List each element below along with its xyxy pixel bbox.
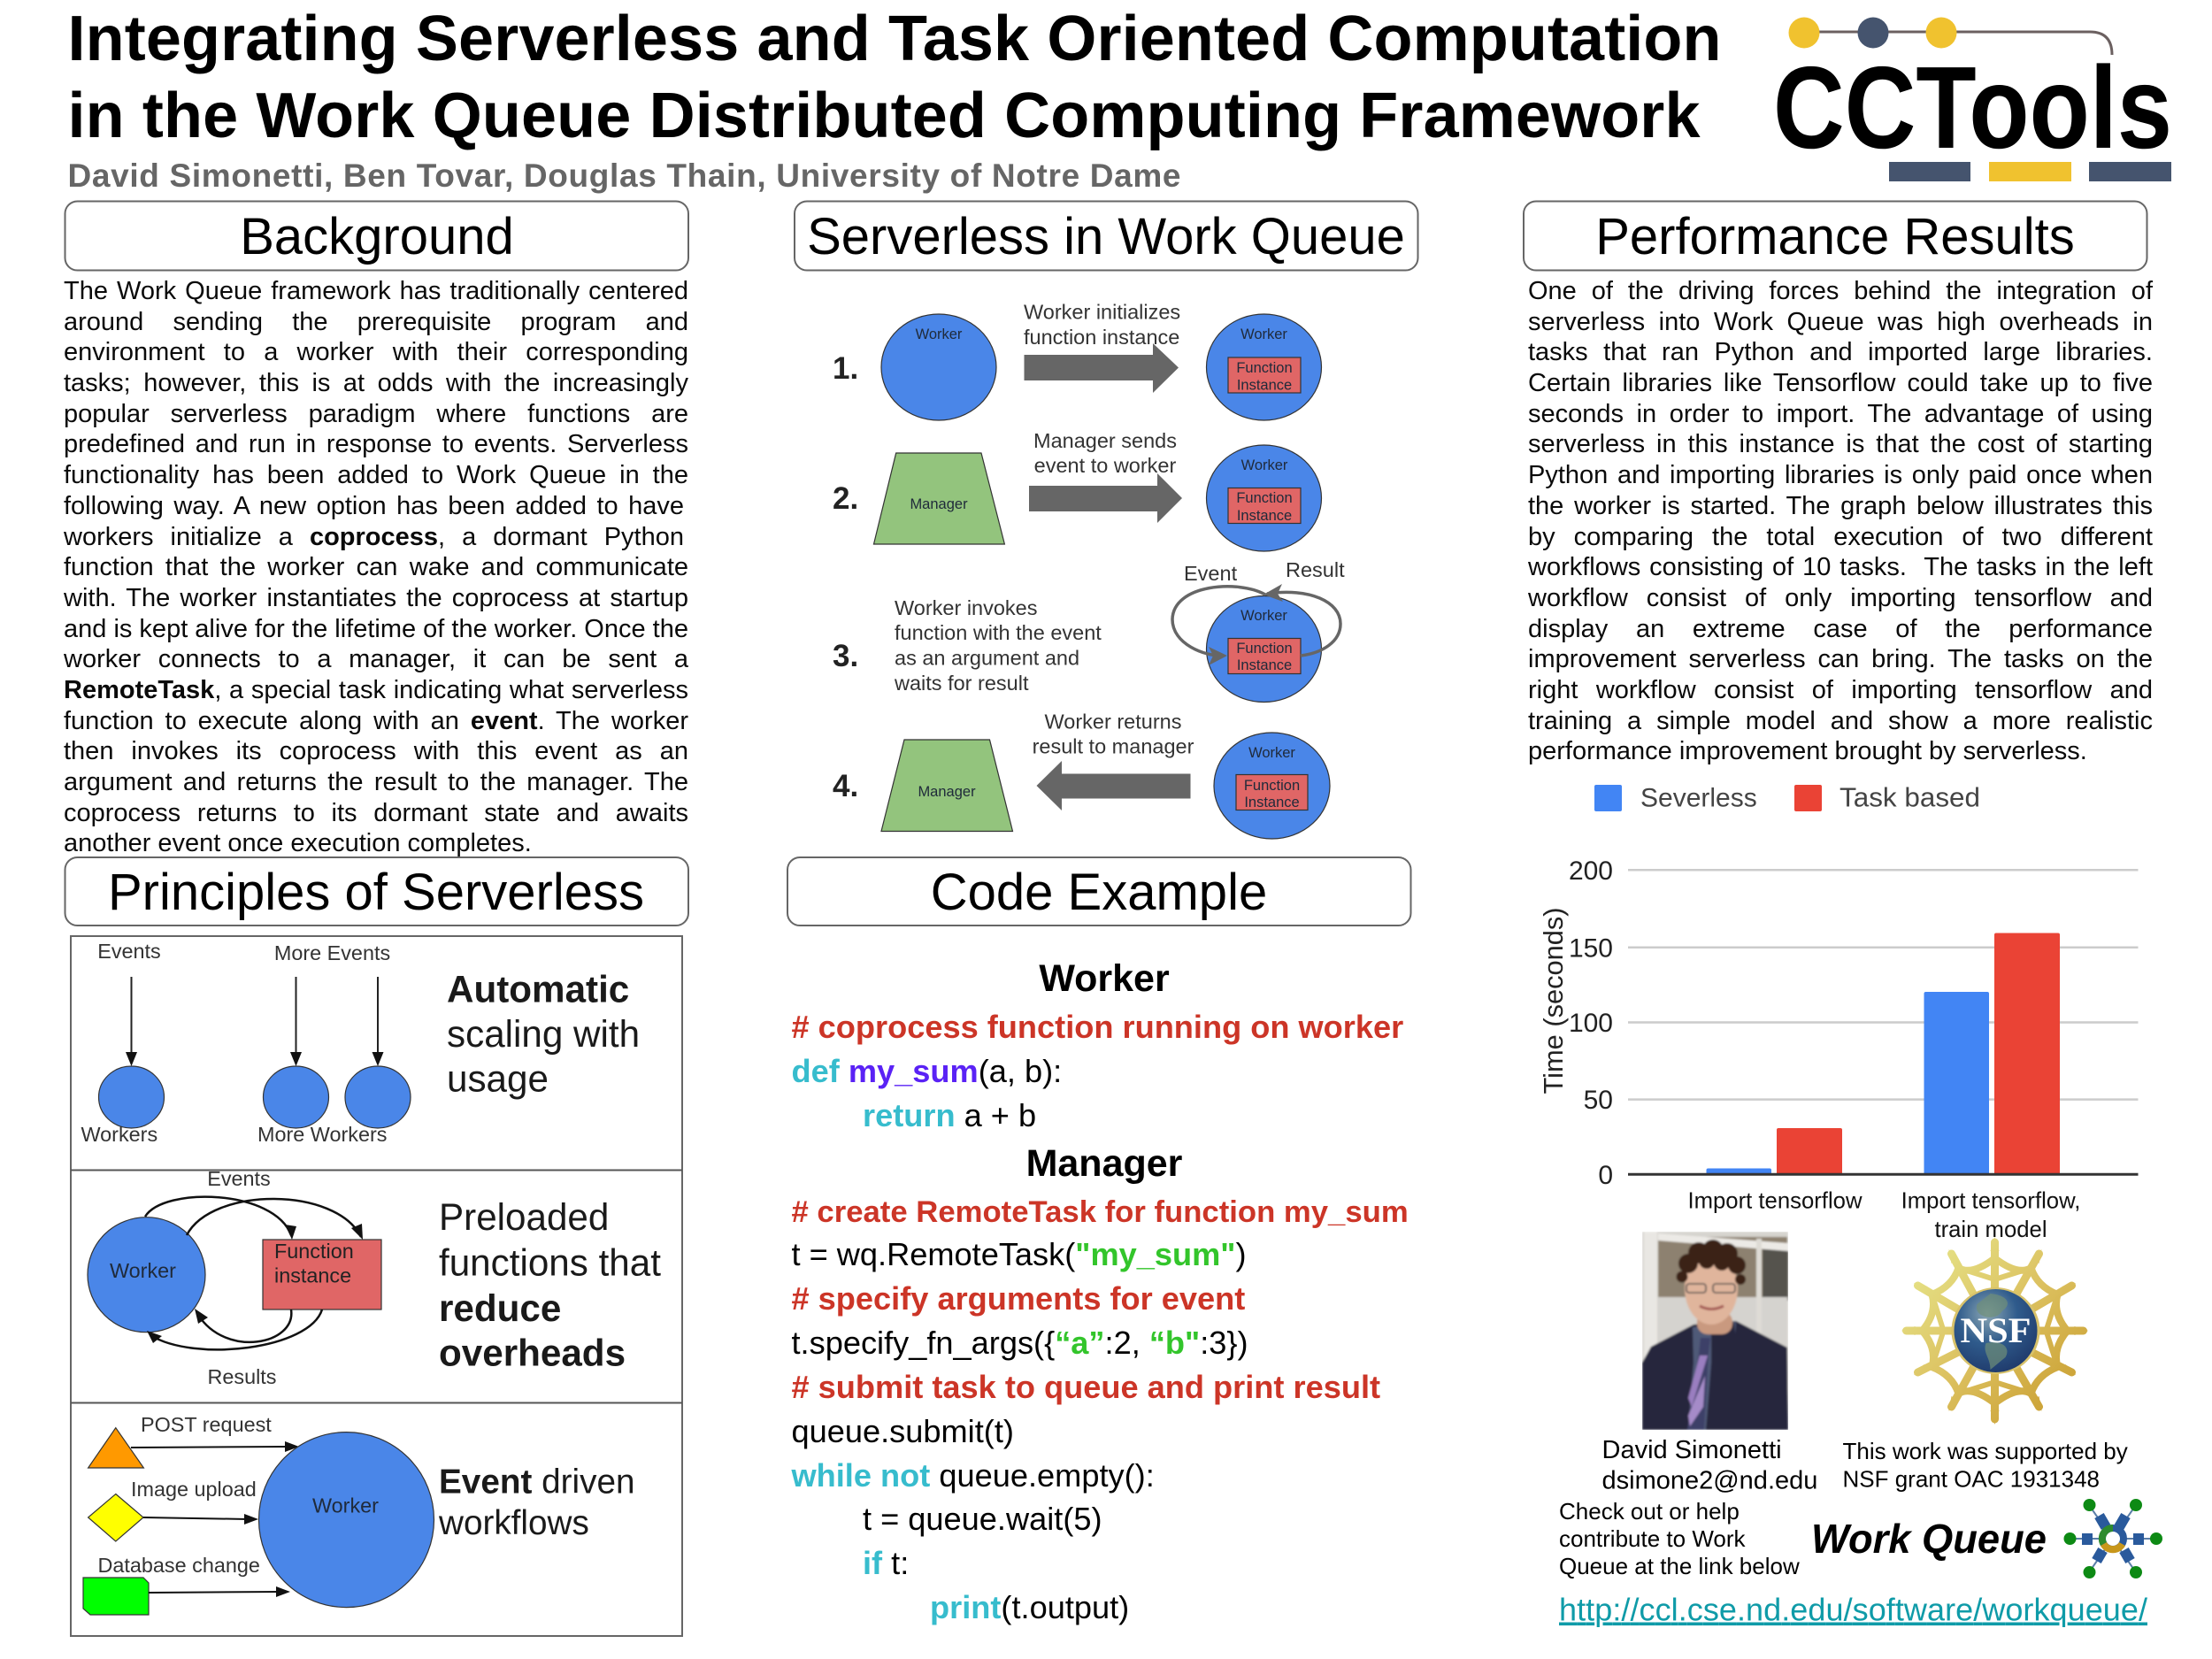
text: background paragraph: with. The worker instantiates the coprocess at startup — [64, 584, 688, 612]
code: manager: # submit task to queue and print result — [791, 1369, 1380, 1405]
text: performance paragraph: tasks that ran Python and imported large libraries. — [1528, 338, 2153, 366]
step 3: Worker invokes — [895, 596, 1038, 619]
step 2: 2. — [833, 481, 858, 516]
text: background paragraph: worker connects to a manager, it can be sent a — [64, 645, 688, 673]
panel: preloaded functions: functions that — [439, 1242, 661, 1283]
text: background paragraph: The Work Queue framework has traditionally centered — [64, 277, 688, 305]
code: manager: Manager — [1026, 1142, 1183, 1185]
text: performance paragraph: by comparing the total execution of two different — [1528, 522, 2153, 550]
code: worker: Worker — [1039, 957, 1170, 1000]
bar chart: 0 — [1598, 1161, 1613, 1190]
step 4: Function — [1244, 778, 1300, 794]
panel: event driven workflows: workflows — [438, 1504, 589, 1542]
logo: NSF — [1901, 1237, 2088, 1425]
step 2: event to worker — [1034, 454, 1177, 477]
step 4: Worker returns — [1045, 710, 1181, 733]
heading: Serverless in Work Queue: Serverless in Work Queue — [807, 208, 1405, 265]
step 1: Worker — [1240, 326, 1287, 342]
legend: Severless — [1640, 784, 1757, 812]
text: background paragraph: popular serverless paradigm where functions are — [64, 400, 688, 428]
text: performance paragraph: serverless in this instance is that the cost of starting — [1528, 430, 2153, 458]
code: manager: queue.submit(t) — [791, 1413, 1014, 1449]
bar chart: 50 — [1584, 1086, 1613, 1115]
text: contribute: contribute to Work — [1559, 1525, 1747, 1552]
step 3: 3. — [833, 639, 858, 673]
panel: preloaded functions: reduce — [439, 1287, 561, 1329]
step 2: Function — [1236, 490, 1293, 506]
code: worker — [791, 957, 1403, 1133]
text: performance paragraph: Certain libraries like Tensorflow could take up to five — [1528, 369, 2153, 397]
step 3: as an argument and — [895, 646, 1079, 669]
bar chart: Time (seconds) — [1538, 907, 1569, 1094]
step 3: Event — [1184, 562, 1238, 585]
link: http://ccl.cse.nd.edu/software/workqueue/ — [1559, 1591, 2147, 1628]
panel: event driven workflows: POST request — [141, 1413, 272, 1436]
text: contribute: Check out or help — [1559, 1498, 1740, 1525]
bar chart: Import tensorflow, — [1901, 1189, 2080, 1214]
text: performance paragraph: performance improvement brought by serverless. — [1528, 737, 2087, 765]
text: background paragraph: around sending the prerequisite program and — [64, 308, 688, 336]
step 1: Worker initializes — [1024, 301, 1180, 324]
code example — [791, 957, 1409, 1625]
code: manager: while not queue.empty(): — [791, 1457, 1155, 1494]
legend — [1594, 782, 1980, 812]
step 3: Function — [1236, 641, 1293, 657]
text: performance paragraph: training a simple model and show a more realistic — [1528, 707, 2153, 735]
heading: Background: Background — [240, 208, 514, 265]
legend: Task based — [1839, 782, 1980, 812]
panel: automatic scaling: Events — [97, 940, 161, 963]
step 2: Manager — [910, 496, 968, 512]
text: background paragraph: and is kept alive for the lifetime of the worker. Once the — [64, 615, 688, 643]
step 4: Manager — [918, 784, 976, 800]
step 1: Instance — [1237, 377, 1292, 393]
title: in the Work Queue Distributed Computing Framework — [67, 81, 1701, 151]
logo: Work Queue: Work Queue — [1811, 1516, 2047, 1562]
step 1: 1. — [833, 351, 858, 386]
panel: event driven workflows — [83, 1413, 634, 1615]
code: manager: print(t.output) — [930, 1589, 1129, 1625]
panel: automatic scaling: Automatic — [447, 968, 629, 1010]
text: performance paragraph: the worker is started. The graph below illustrates this — [1528, 492, 2153, 520]
code: manager: # specify arguments for event — [791, 1280, 1245, 1317]
panel: preloaded functions: Preloaded — [439, 1196, 609, 1238]
text: background paragraph: environment to a worker with their corresponding — [64, 338, 688, 366]
step 3: Result — [1286, 558, 1345, 581]
text: background paragraph: function that the worker can wake and communicate — [64, 553, 688, 581]
text: performance paragraph: workflow consist of only importing tensorflow and — [1528, 584, 2153, 612]
step 3: waits for result — [894, 672, 1029, 695]
text: background paragraph: workers initialize a coprocess, a dormant Python — [64, 522, 684, 550]
text: performance paragraph: right workflow consist of importing tensorflow and — [1528, 676, 2153, 704]
bar chart: 100 — [1569, 1009, 1613, 1038]
text: grant: NSF grant OAC 1931348 — [1842, 1465, 2100, 1492]
text: background paragraph: predefined and run in response to events. Serverless — [64, 430, 688, 458]
bar chart: 200 — [1569, 856, 1613, 886]
bar chart: Import tensorflow — [1687, 1189, 1863, 1214]
step 4: Instance — [1244, 795, 1300, 810]
code: manager: t.specify_fn_args({“a”:2, “b":3}) — [791, 1325, 1248, 1361]
bar chart — [1538, 856, 2138, 1242]
code: worker: def my_sum(a, b): — [791, 1053, 1062, 1089]
authors: David Simonetti, Ben Tovar, Douglas Thain, University of Notre Dame — [67, 157, 1180, 194]
step 4: result to manager — [1033, 734, 1194, 757]
title — [67, 4, 1722, 151]
text: performance paragraph: seconds in order to import. The advantage of using — [1528, 400, 2153, 428]
panel: automatic scaling: Workers — [81, 1123, 157, 1146]
step 2: Worker — [1241, 457, 1288, 473]
panel: preloaded functions: Function — [274, 1240, 354, 1263]
panel: preloaded functions: Events — [207, 1167, 271, 1190]
text: contribute — [1559, 1498, 1800, 1579]
text: background paragraph: RemoteTask, a special task indicating what serverless — [64, 676, 688, 704]
step 2: Manager sends — [1033, 429, 1177, 452]
logo: NSF: NSF — [1961, 1310, 2032, 1350]
step 4: Worker — [1248, 745, 1295, 761]
text: grant — [1842, 1438, 2128, 1492]
text: contact: dsimone2@nd.edu — [1601, 1467, 1817, 1495]
text: background paragraph: tasks; however, this is at odds with the increasingly — [64, 369, 688, 397]
text: background paragraph: function to execute along with an event. The worker — [64, 707, 688, 735]
text: contribute: Queue at the link below — [1559, 1553, 1800, 1579]
panel: preloaded functions: overheads — [439, 1333, 626, 1373]
heading: Code Example — [787, 857, 1410, 926]
panel: event driven workflows: Image upload — [131, 1478, 257, 1501]
code: manager: if t: — [863, 1545, 909, 1581]
step 3 — [833, 558, 1345, 703]
panel: event driven workflows: Event driven — [439, 1463, 634, 1501]
heading: Background — [65, 202, 688, 271]
step 3: Worker — [1240, 608, 1287, 624]
text: background paragraph: functionality has been added to Work Queue in the — [64, 461, 688, 489]
panel: automatic scaling: usage — [447, 1058, 549, 1099]
panel: preloaded functions: instance — [274, 1263, 351, 1286]
text: contact — [1601, 1436, 1817, 1495]
code: manager — [791, 1142, 1409, 1625]
text: performance paragraph: serverless into Work Queue was high overheads in — [1528, 308, 2153, 336]
text: performance paragraph: workflows consisting of 10 tasks. The tasks in the left — [1528, 553, 2153, 581]
step 4: 4. — [833, 769, 858, 803]
heading: Performance Results: Performance Results — [1595, 208, 2075, 265]
step 1: Function — [1236, 360, 1293, 376]
text: background paragraph: coprocess returns to its dormant state and awaits — [64, 799, 688, 827]
heading: Performance Results — [1524, 202, 2147, 271]
code: manager: t = queue.wait(5) — [863, 1501, 1102, 1537]
text: background paragraph — [64, 277, 688, 857]
step 2 — [833, 429, 1322, 551]
panel: automatic scaling — [81, 940, 640, 1146]
step 3: Instance — [1237, 657, 1292, 673]
panel: automatic scaling: More Workers — [257, 1123, 387, 1146]
panel: principles of serverless — [71, 936, 682, 1636]
title: Integrating Serverless and Task Oriented Computation — [67, 4, 1722, 74]
panel: preloaded functions — [88, 1167, 661, 1388]
step 2: Instance — [1237, 508, 1292, 524]
code: worker: return a + b — [863, 1097, 1036, 1133]
code: manager: t = wq.RemoteTask("my_sum") — [791, 1236, 1246, 1272]
text: background paragraph: following way. A new option has been added to have — [64, 492, 684, 520]
text: background paragraph: another event once execution completes. — [64, 829, 532, 857]
text: performance paragraph — [1528, 277, 2154, 765]
bar chart: train model — [1934, 1217, 2047, 1242]
panel: preloaded functions: Worker — [110, 1259, 176, 1282]
text: background paragraph: then invokes its coprocess with this event as an — [64, 737, 688, 765]
heading: Principles of Serverless: Principles of Serverless — [108, 864, 644, 921]
panel: automatic scaling: More Events — [274, 941, 390, 964]
step 1: Worker — [916, 326, 963, 342]
code: manager: # create RemoteTask for function my_sum — [791, 1195, 1409, 1229]
step 3: function with the event — [895, 621, 1102, 644]
text: performance paragraph: Python and importing libraries is only paid once when — [1528, 461, 2153, 489]
panel: event driven workflows: Database change — [97, 1554, 260, 1577]
diagram: serverless in work queue steps — [833, 301, 1345, 839]
photo: David Simonetti — [1642, 1232, 1788, 1430]
step 1 — [833, 301, 1322, 420]
panel: preloaded functions: Results — [207, 1365, 276, 1388]
heading: Code Example: Code Example — [931, 864, 1267, 921]
panel: event driven workflows: Worker — [312, 1494, 379, 1517]
text: background paragraph: argument and returns the result to the manager. The — [64, 768, 688, 796]
text: grant: This work was supported by — [1842, 1438, 2128, 1464]
text: performance paragraph: display an extreme case of the performance — [1528, 615, 2153, 643]
step 4 — [833, 710, 1330, 839]
code: worker: # coprocess function running on worker — [791, 1009, 1403, 1045]
text: contact: David Simonetti — [1601, 1436, 1782, 1464]
bar chart: 150 — [1569, 934, 1613, 963]
text: performance paragraph: improvement serverless can bring. The tasks on the — [1528, 645, 2153, 673]
step 1: function instance — [1024, 326, 1179, 349]
text: performance paragraph: One of the driving forces behind the integration of — [1528, 277, 2153, 305]
panel: automatic scaling: scaling with — [447, 1013, 640, 1055]
logo: Work Queue — [1811, 1499, 2162, 1578]
